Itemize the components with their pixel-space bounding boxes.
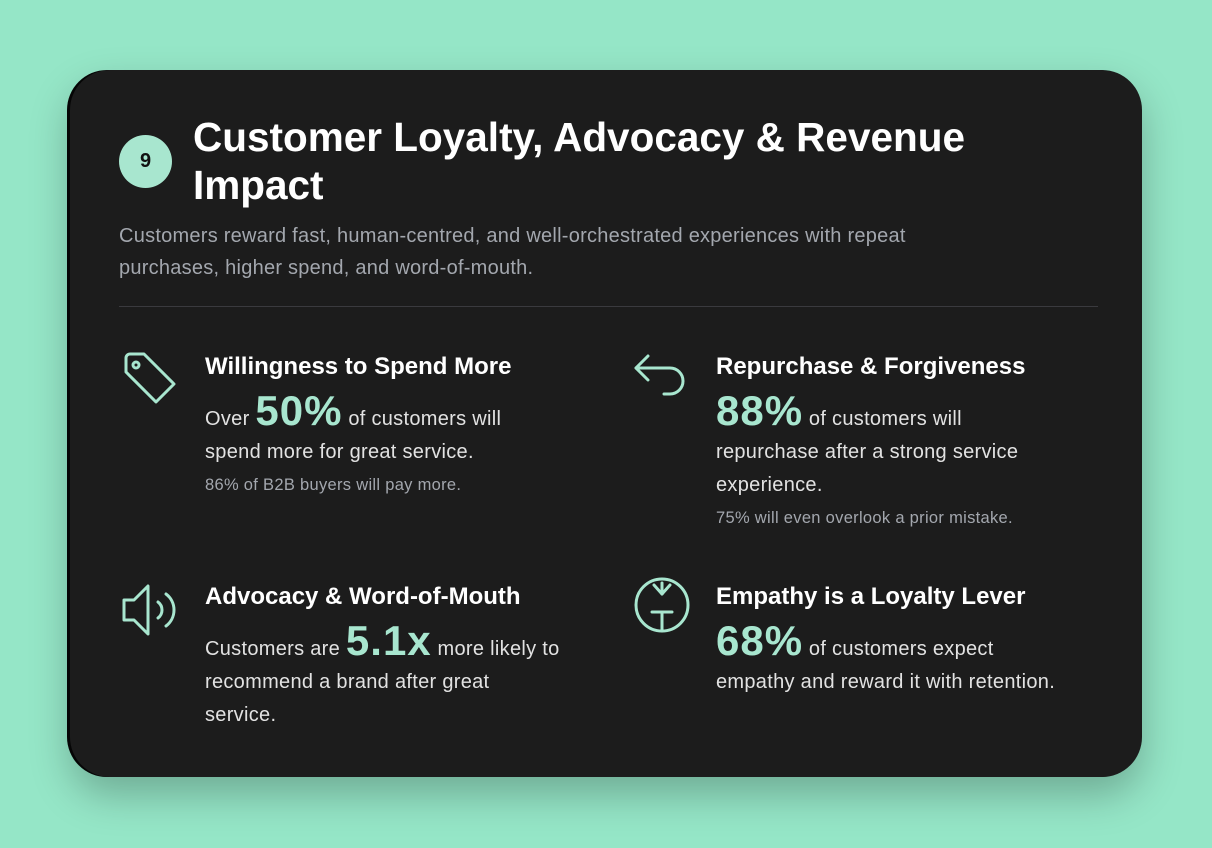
item: advocacy: service. bbox=[205, 704, 276, 726]
title: Customer Loyalty, Advocacy & Revenue Impact bbox=[193, 114, 965, 208]
item: repurchase: 75% will even overlook a prior mistake. bbox=[716, 509, 1013, 527]
item: repurchase: 88% of customers will repurchase after a strong service experience. bbox=[716, 387, 1018, 496]
item: advocacy: Advocacy & Word-of-Mouth bbox=[205, 583, 521, 610]
item: empathy: Empathy is a Loyalty Lever bbox=[716, 583, 1025, 610]
icon: price tag bbox=[124, 352, 176, 404]
icon: speaker bbox=[122, 584, 176, 636]
badge: section number bbox=[119, 135, 172, 188]
badge: section number: 9 bbox=[140, 150, 151, 172]
subtitle: Customers reward fast, human-centred, and well-orchestrated experiences with repeat bbox=[119, 225, 906, 247]
item: repurchase: Repurchase & Forgiveness bbox=[716, 353, 1025, 380]
item: advocacy: recommend a brand after great bbox=[205, 671, 489, 693]
subtitle: purchases, higher spend, and word-of-mouth. bbox=[119, 257, 533, 279]
item: empathy bbox=[716, 583, 1055, 693]
item: willingness to spend: Over 50% of customers will spend more for great service. bbox=[205, 387, 501, 463]
icon: empathy gauge bbox=[634, 578, 690, 632]
item: repurchase bbox=[716, 353, 1025, 527]
item: advocacy bbox=[205, 583, 560, 726]
subtitle bbox=[119, 225, 906, 279]
card bbox=[70, 70, 1142, 777]
item: willingness to spend bbox=[205, 353, 511, 494]
item: willingness to spend: 86% of B2B buyers will pay more. bbox=[205, 476, 461, 494]
item: willingness to spend: Willingness to Spend More bbox=[205, 353, 511, 380]
item: empathy: 68% of customers expect empathy and reward it with retention. bbox=[716, 617, 1055, 693]
item: advocacy: Customers are 5.1x more likely to bbox=[205, 617, 560, 664]
icon: return arrow bbox=[634, 354, 684, 396]
